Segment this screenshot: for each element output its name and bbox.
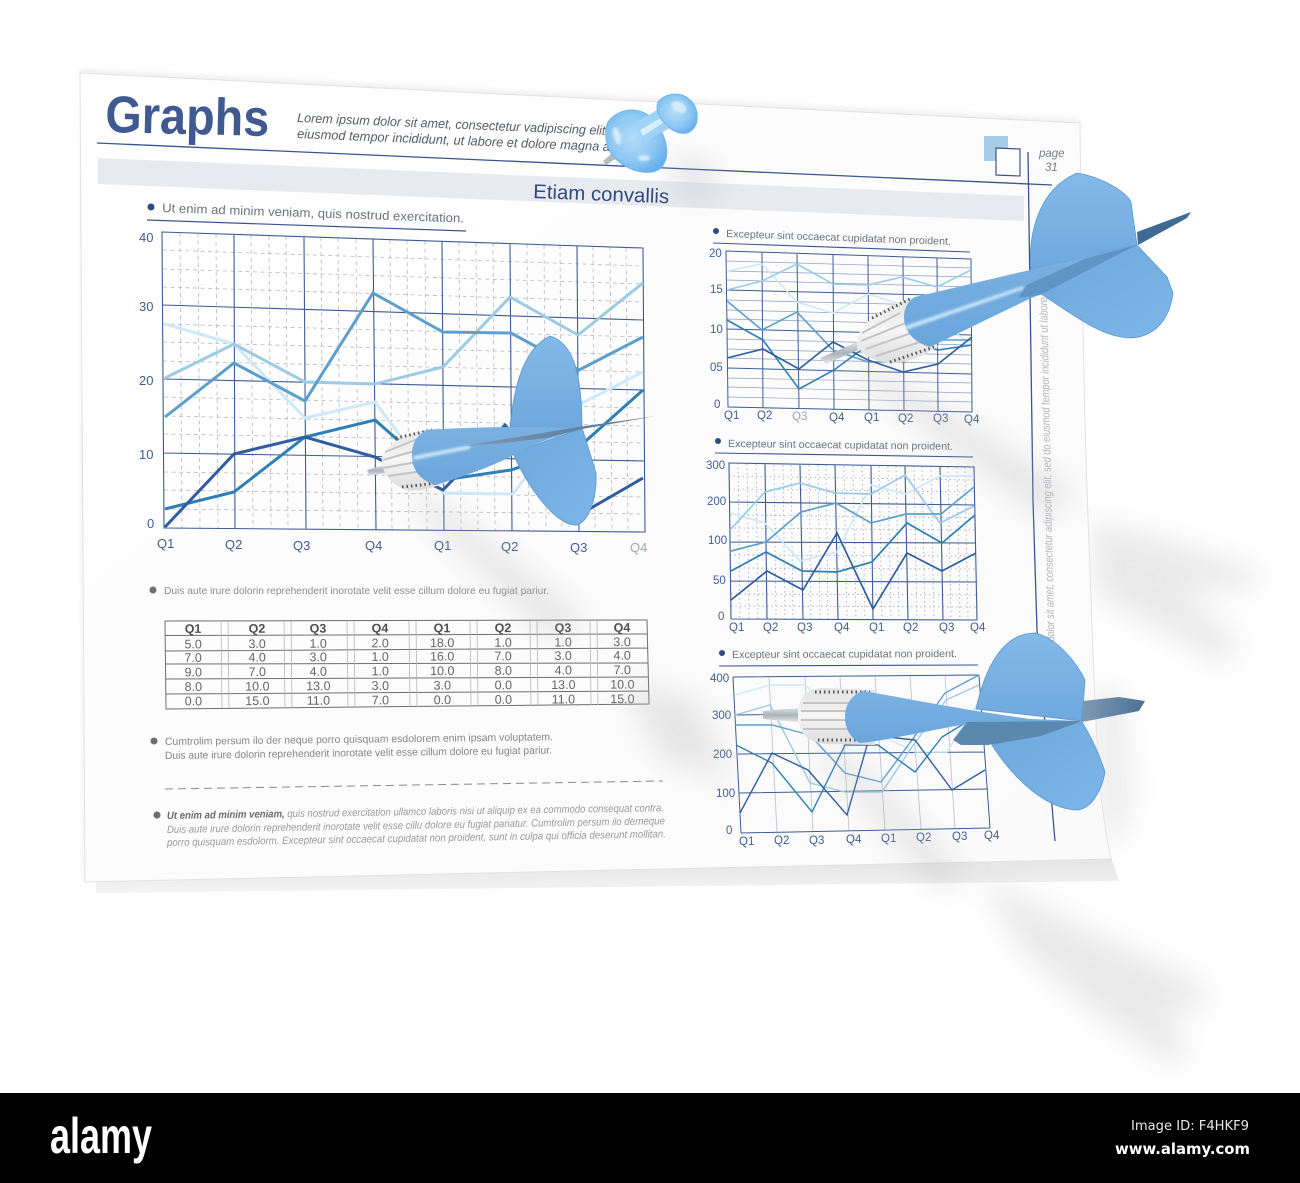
dart fin: top [1030,173,1137,270]
table rows: 0.0 [495,693,512,707]
table rows: 1.0 [372,664,389,678]
chart heading: Excepteur sint occaecat cupidatat non proident. [726,228,951,248]
dart barrel [857,297,938,363]
x axis labels [739,830,1000,848]
table header: Q1 [185,622,201,636]
page number [1038,148,1065,174]
y axis labels [709,248,723,411]
panel: small chart 3 [710,648,1000,848]
dart body highlight [905,286,1024,330]
dashed separator [165,781,663,789]
panel: small chart 1 [709,228,980,426]
table rows: 0.0 [434,693,451,707]
table rows: 1.0 [554,635,572,649]
table rows: 10.0 [610,678,635,692]
dart: top right [820,173,1191,364]
data lines [735,675,985,815]
chart heading: Excepteur sint occaecat cupidatat non proident. [732,648,957,661]
table header: Q2 [495,621,511,635]
x axis labels: Q3 [792,411,807,423]
x axis labels [157,536,647,555]
dart fin: lower edge [953,721,1082,745]
x axis labels: Q3 [933,413,948,425]
y axis labels: 0 [718,611,724,623]
x axis labels: Q1 [434,538,451,553]
table header: Q1 [434,621,450,635]
y axis labels: 0 [726,825,732,837]
table rows: 5.0 [184,637,202,651]
table rows: 11.0 [552,692,575,706]
table rows: 3.0 [309,650,327,664]
table rows: 8.0 [185,680,202,694]
y axis labels: 10 [139,447,153,462]
table rows [184,635,635,708]
title: Graphs: Graphs [105,86,270,148]
x axis labels: Q3 [939,622,954,634]
major grid [726,251,972,412]
y axis labels [710,673,735,837]
major grid [729,463,977,620]
dart barrel [382,428,445,491]
footer note [154,802,666,849]
table rows: 9.0 [185,665,202,679]
table rows: 0.0 [185,694,202,708]
dart fin: bottom [992,722,1105,810]
table rows: 16.0 [430,649,454,664]
table grid [165,620,649,709]
table header: Q3 [310,622,326,636]
table header: Q2 [249,622,265,636]
right margin rule and vertical text: Lorem ipsum dolor sit amet, consectetur adipiscing elit, sed do eiusmod tempor incididunt ut labore [1038,297,1058,697]
table rows: 10.0 [430,664,455,678]
table rows: 7.0 [184,651,202,665]
x axis labels: Q1 [739,836,754,848]
header intro text: eiusmod tempor incididunt, ut labore et dolore magna a [297,126,610,154]
table rows: 4.0 [555,663,572,677]
table rows: 7.0 [372,693,389,707]
y axis labels: 30 [139,299,153,314]
x axis labels [729,622,986,634]
dart fin: edge [463,416,656,446]
table rows: 0.0 [495,678,512,692]
minor grid [726,261,972,402]
table header: Q4 [372,621,388,635]
x axis labels: Q3 [570,540,587,555]
table header: Q3 [555,621,571,635]
x axis labels: Q4 [630,540,647,555]
right margin rule and vertical text [1028,152,1058,841]
x axis labels: Q1 [724,410,739,422]
x axis labels: Q1 [881,833,896,845]
table rows: 2.0 [371,636,389,650]
image id: Image ID: F4HKF9 [1131,1119,1249,1134]
dart body [904,245,1137,347]
pin head [657,94,697,133]
dart fin: inner edge [1018,245,1137,298]
table rows: 13.0 [306,679,331,693]
x axis labels: Q2 [903,622,918,634]
table rows: 7.0 [494,649,512,663]
y axis labels: 300 [706,460,725,472]
x axis labels: Q2 [757,410,772,422]
x axis labels: Q2 [501,539,518,554]
x axis labels: Q1 [157,536,174,551]
vertical grid [769,675,955,832]
table rows: 3.0 [434,679,451,693]
table rows: 3.0 [372,679,389,693]
dart: main chart [367,336,656,525]
x axis labels: Q2 [763,622,778,634]
y axis labels: 0 [714,399,720,411]
footer note: Duis aute irure dolorin reprehenderit inorotate velit esse cillu dolore eu fugiat pariatur. Cumtrolim persum ilo derneque [167,815,665,836]
y axis labels [139,230,154,531]
y axis labels: 0 [147,516,154,531]
chart heading [715,438,973,457]
header intro text: Lorem ipsum dolor sit amet, consectetur vadipiscing elit, [297,110,609,138]
table rows: 11.0 [307,694,330,708]
x axis labels: Q1 [729,622,744,634]
dart barrel [798,688,875,745]
table rows: 7.0 [249,665,266,679]
x axis labels: Q3 [952,831,967,843]
table rows: 10.0 [245,679,270,694]
note below table: Duis aute irure dolorin reprehenderit inorotate velit esse cillum dolore eu fugiat pariur. [165,745,552,762]
paper sheet [80,73,1111,882]
x axis labels: Q4 [829,412,845,424]
table rows: 13.0 [551,678,576,692]
table rows: 1.0 [494,636,512,650]
table rows: 4.0 [310,665,327,679]
major grid [733,675,990,833]
chart heading: Excepteur sint occaecat cupidatat non proident. [728,438,953,453]
x axis labels: Q2 [225,537,242,552]
y axis labels: 200 [713,749,732,761]
dart fin: bottom [513,428,596,525]
table rows: 15.0 [610,692,635,706]
table rows: 18.0 [430,636,454,650]
table rows: 1.0 [371,650,389,664]
y axis labels: 300 [712,710,731,722]
x axis labels: Q3 [809,835,824,847]
dart body highlight [413,445,470,460]
x axis labels: Q1 [869,622,884,634]
dart: bottom right [763,633,1145,810]
table rows: 3.0 [613,635,631,649]
dart tip [367,465,386,476]
dart body [412,427,580,485]
note above table: Duis aute irure dolorin reprehenderit inorotate velit esse cillum dolore eu fugiat pariur. [164,585,549,597]
table column rules [221,620,598,708]
page header [97,86,1065,185]
header intro text [297,110,610,154]
y axis labels: 20 [139,373,153,388]
x axis labels [724,410,980,426]
y axis labels: 100 [716,788,735,800]
dart tip [820,342,858,364]
x axis labels: Q4 [970,622,986,634]
x axis labels: Q4 [964,414,980,426]
note below table [150,731,553,762]
x axis labels: Q1 [864,412,879,424]
footer note: Ut enim ad minim veniam, quis nostrud exercitation ullamco laboris nisi ut aliquip ex ea commodo consequat contra. [167,802,664,822]
shadow beneath paper [80,73,1119,893]
dart fin: back edge [1082,697,1145,722]
x axis labels: Q3 [293,538,310,553]
y axis labels: 05 [710,362,723,374]
pin needle [603,150,620,165]
data lines [730,475,976,609]
page number: 31 [1045,162,1058,174]
note below table: Cumtrolim persum ilo der neque porro quisquam esdolorem enim ipsam voluptatem. [165,731,553,748]
minor grid [163,233,645,532]
table header [185,621,630,636]
y axis labels: 400 [710,673,729,685]
x axis labels: Q4 [984,830,1000,842]
dart fin: top [510,336,582,428]
site url: www.alamy.com [1115,1140,1250,1158]
footer note: porro quisquam esdolorm. Excepteur sint occaecat cupidatat non proident, sunt in culpa qui officia deserunt mollitan. [166,828,666,849]
y axis labels: 50 [713,575,726,587]
dart fin: back edge [1137,212,1191,245]
cast shadows on paper [400,150,1075,890]
pin stem [637,108,670,143]
table rows: 7.0 [614,663,631,677]
y axis labels: 40 [139,230,153,245]
dart body [845,691,1082,743]
cast shadows on background [980,520,1262,1065]
chart heading [719,648,978,666]
data table [165,620,649,709]
table rows: 15.0 [245,694,270,708]
panel: small chart 2 [706,438,986,634]
icon: overlapping squares [984,136,1020,176]
footer bar [0,1093,1300,1183]
table rows: 1.0 [309,637,327,651]
push pin [603,94,697,172]
page number: page [1038,148,1065,160]
y axis labels: 15 [710,284,723,296]
x axis labels: Q2 [916,832,931,844]
x axis labels: Q4 [365,538,382,553]
pin highlights [611,99,688,161]
x axis labels: Q4 [834,622,850,634]
dart fin: bottom [1040,245,1173,338]
table rows: 3.0 [248,637,266,651]
x axis labels: Q2 [774,835,789,847]
y axis labels: 10 [710,324,723,336]
table header: Q4 [614,621,630,635]
section band: Etiam convallis [98,158,1024,221]
pin stem highlight [640,116,666,136]
table rows: 4.0 [613,649,631,663]
y axis labels: 100 [708,535,727,547]
dart fin: top [976,633,1085,721]
x axis labels: Q2 [898,413,913,425]
pin base [606,110,667,172]
panel: main line chart [139,201,647,555]
y axis labels: 20 [709,248,722,260]
x axis labels: Q3 [797,622,812,634]
data lines [165,283,643,527]
section band: Etiam convallis: Etiam convallis [533,181,670,208]
y axis labels: 200 [707,496,726,508]
brand wordmark: alamy [50,1108,152,1164]
table rows: 3.0 [554,649,572,663]
major grid [162,232,645,532]
chart heading: Ut enim ad minim veniam, quis nostrud exercitation. [162,201,464,226]
data lines [727,264,972,389]
table rows: 8.0 [495,664,512,678]
dart tip [763,708,798,722]
y axis labels [706,460,727,623]
dotted minor grid [729,463,977,620]
table rows: 4.0 [248,650,266,665]
x axis labels: Q4 [846,834,862,846]
